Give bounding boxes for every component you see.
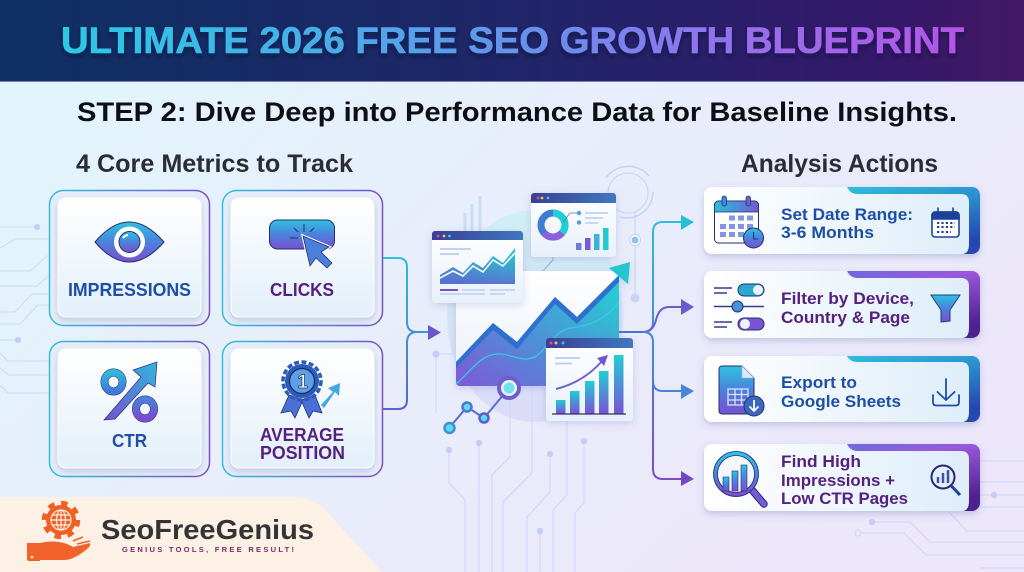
icon: small magnifier bbox=[932, 466, 960, 495]
header banner bbox=[0, 0, 1024, 82]
icon: funnel bbox=[931, 295, 960, 322]
text: export: Export to bbox=[781, 374, 857, 392]
icon: sheet with download bbox=[719, 366, 764, 416]
icon: small calendar bbox=[932, 208, 959, 237]
window: donut chart bbox=[531, 193, 616, 257]
text: find pages bbox=[781, 453, 908, 508]
icon: open hand bbox=[27, 537, 90, 561]
connector: chart to actions bbox=[619, 215, 694, 486]
title: ULTIMATE 2026 FREE SEO GROWTH BLUEPRINT bbox=[61, 19, 964, 61]
subtitle: STEP 2: Dive Deep into Performance Data for Baseline Insights. bbox=[77, 97, 957, 127]
central analytics illustration bbox=[432, 166, 653, 433]
text: filter bbox=[781, 290, 914, 327]
decorative gauge bbox=[465, 166, 653, 302]
window: bar chart bbox=[546, 338, 633, 421]
window: line chart bbox=[432, 231, 523, 303]
panel: ctr bbox=[50, 342, 210, 476]
panel: clicks bbox=[222, 190, 382, 326]
icon: eye bbox=[95, 222, 164, 262]
text: set date range: 3-6 Months bbox=[781, 224, 874, 242]
text: set date range: Set Date Range: bbox=[781, 206, 913, 224]
text: filter: Country & Page bbox=[781, 309, 910, 327]
icon: sliders bbox=[714, 284, 764, 330]
label: ctr: CTR bbox=[112, 430, 147, 451]
text: find pages: Low CTR Pages bbox=[781, 490, 908, 508]
icon: download bbox=[933, 379, 959, 406]
panel: average position bbox=[222, 342, 382, 476]
label: average position bbox=[260, 424, 345, 463]
label: average position: POSITION bbox=[260, 442, 345, 463]
icon: click button bbox=[270, 220, 334, 268]
logo panel bbox=[0, 497, 382, 572]
text: set date range bbox=[781, 206, 913, 242]
icon: ribbon badge bbox=[281, 362, 340, 418]
heading: 4 core metrics: 4 Core Metrics to Track bbox=[76, 150, 353, 178]
action card: filter bbox=[704, 271, 980, 338]
connector: metrics to chart bbox=[383, 258, 441, 409]
heading: analysis actions: Analysis Actions bbox=[741, 150, 938, 178]
text: find pages: Impressions + bbox=[781, 472, 895, 490]
action card: set date range bbox=[704, 187, 980, 254]
bottom and right circuit decoration bbox=[432, 350, 1024, 572]
text: find pages: Find High bbox=[781, 453, 861, 471]
icon: calendar with clock bbox=[714, 196, 764, 248]
label: clicks: CLICKS bbox=[270, 279, 334, 300]
label: average position: AVERAGE bbox=[260, 424, 344, 445]
icon: percent arrow bbox=[104, 362, 157, 420]
icon: ribbon badge: 1 bbox=[298, 372, 308, 393]
node chain bbox=[444, 376, 521, 433]
label: impressions: IMPRESSIONS bbox=[68, 279, 191, 300]
text: export bbox=[781, 374, 901, 411]
logo tagline: GENIUS TOOLS, FREE RESULT! bbox=[122, 545, 294, 554]
icon: large magnifier bbox=[714, 452, 764, 504]
icon: gear with globe bbox=[44, 503, 78, 537]
left circuit decoration bbox=[0, 224, 58, 393]
text: filter: Filter by Device, bbox=[781, 290, 914, 308]
action card: find pages bbox=[704, 444, 980, 511]
logo wordmark: SeoFreeGenius bbox=[101, 514, 314, 545]
text: export: Google Sheets bbox=[781, 393, 901, 411]
action card: export bbox=[704, 356, 980, 422]
panel: impressions bbox=[50, 190, 210, 326]
panel: main growth chart bbox=[456, 262, 630, 386]
